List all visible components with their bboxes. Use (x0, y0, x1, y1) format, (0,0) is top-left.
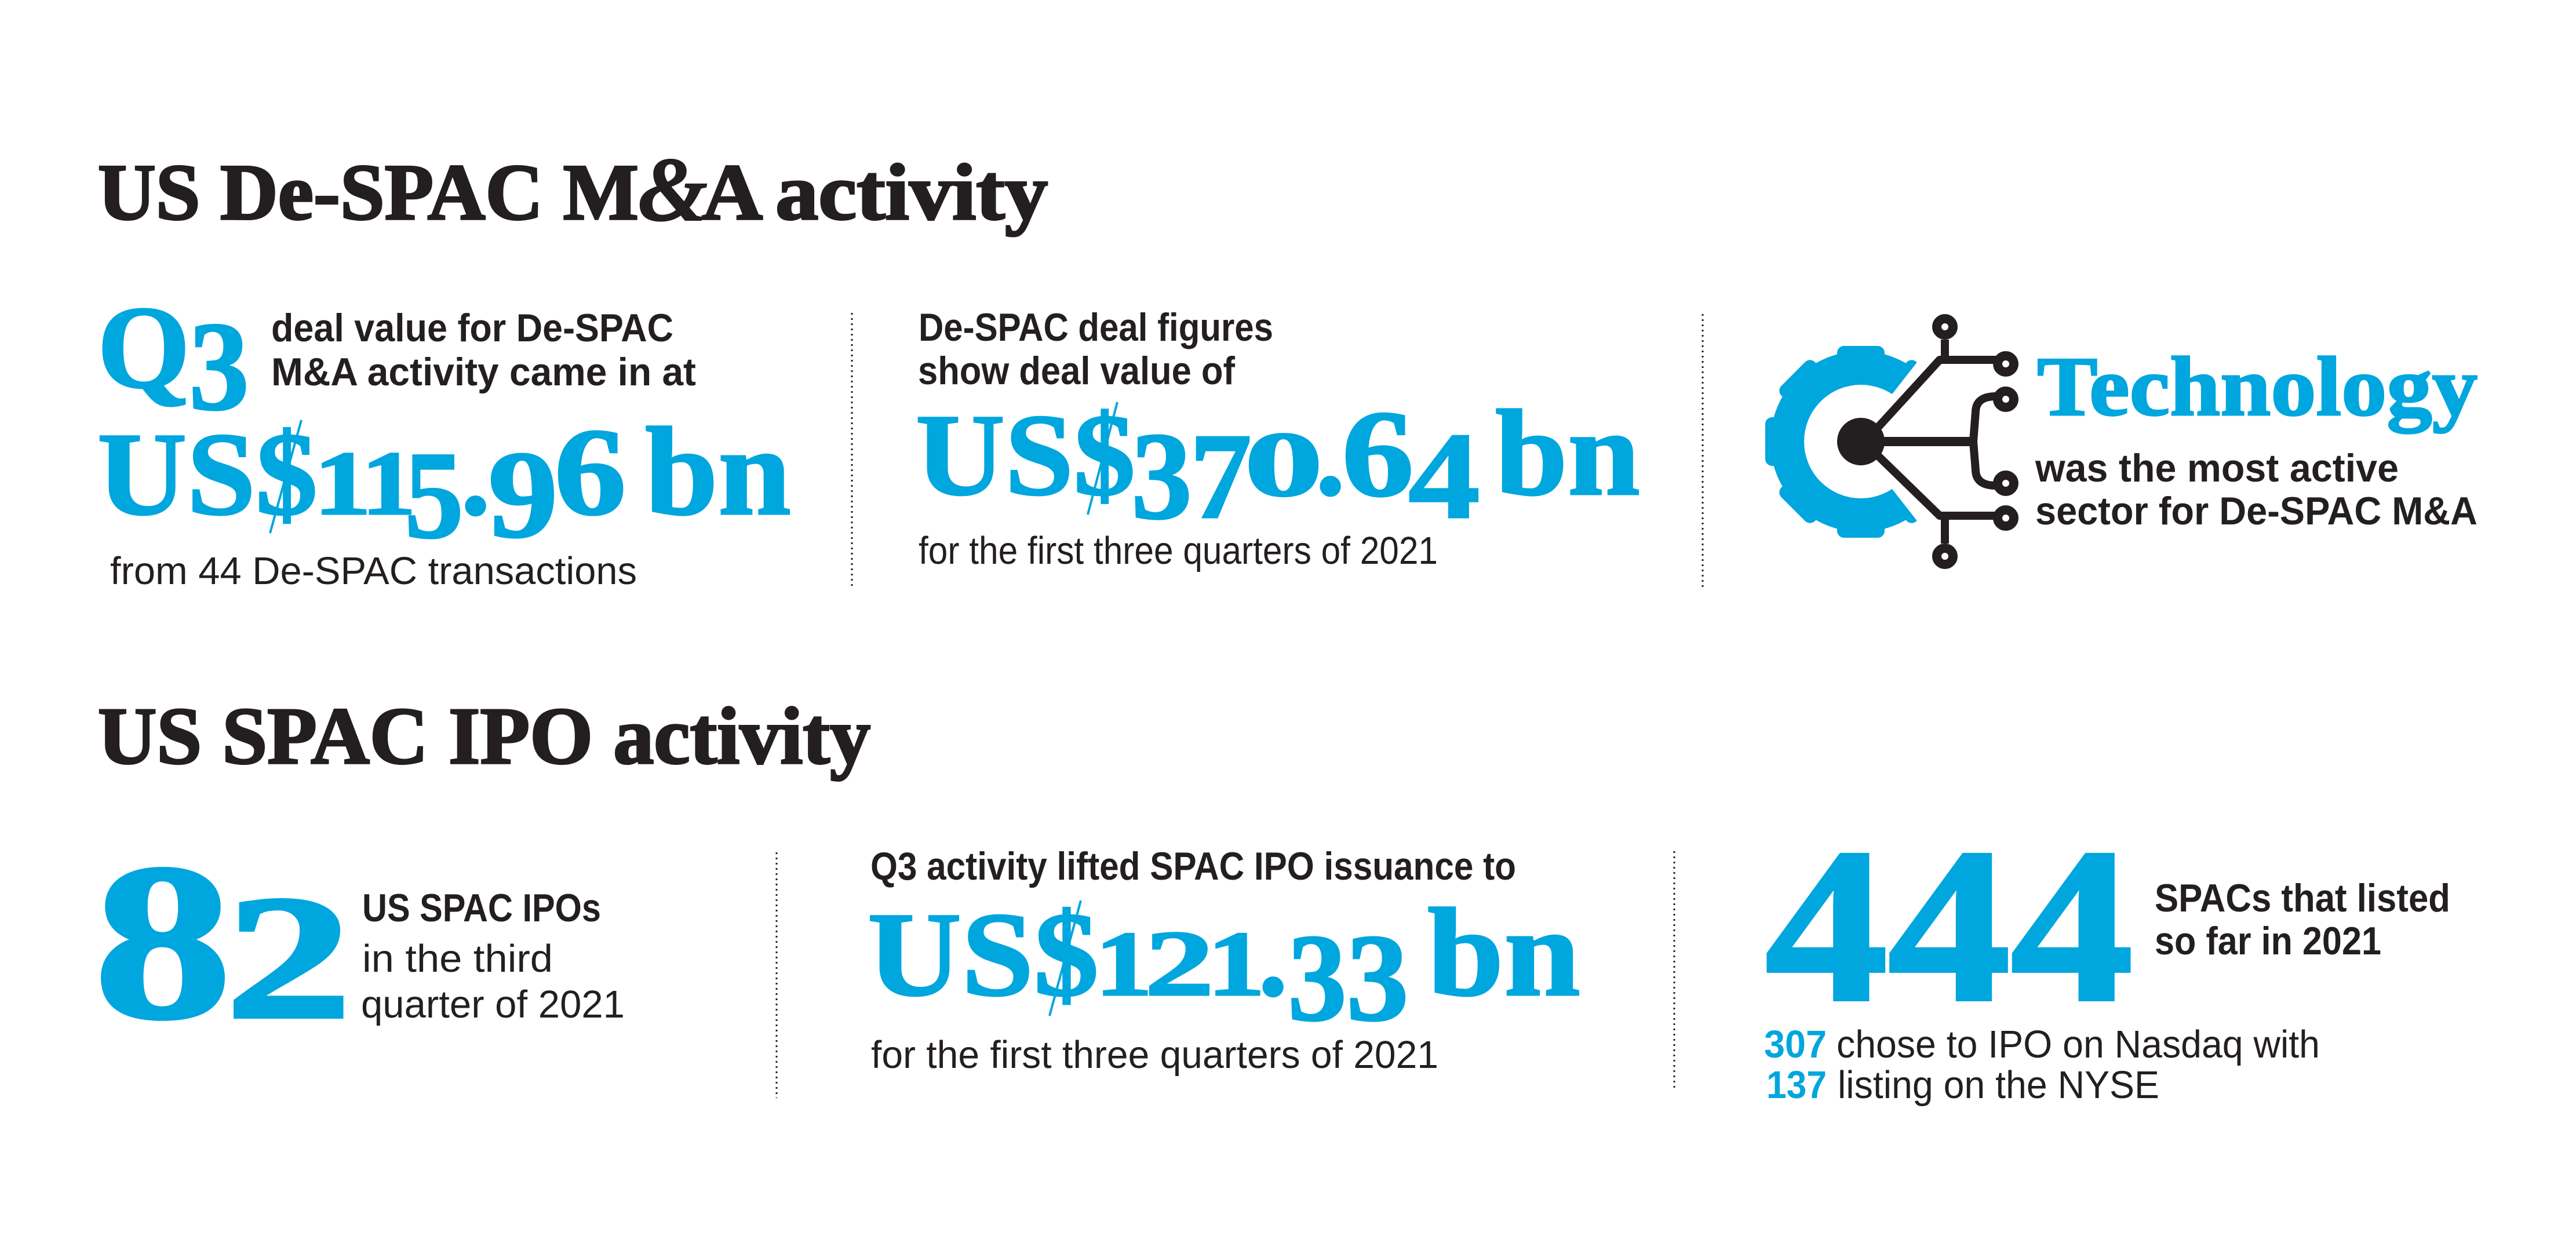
figure: US$121.33 bn: 2 (1145, 912, 1214, 1016)
heading: US De-SPAC M&A activity: US De-SPAC M (98, 148, 639, 236)
text: Nasdaq and NYSE split: listing on the NYSE (1838, 1063, 2159, 1107)
heading: US De-SPAC M&A activity (98, 139, 1048, 240)
figure: 82: 2 (225, 859, 352, 1055)
text: deal figures description: De-SPAC deal figures (919, 305, 1273, 349)
figure: US$370.64 bn: 7 (1190, 408, 1252, 544)
text: US SPAC IPOs in the third quarter of 2021: US SPAC IPOs (362, 886, 601, 930)
figure: US$370.64 bn: US$ (916, 390, 1135, 520)
text: deal value description: M&A activity came in at (271, 350, 696, 394)
Q3 label (97, 282, 249, 437)
figure: US$370.64 bn: 4 (1408, 407, 1480, 545)
figure: US$370.64 bn (916, 385, 1640, 545)
figure: US$121.33 bn: 1 (1207, 912, 1265, 1015)
figure: US$121.33 bn (868, 883, 1580, 1047)
figure: US$370.64 bn: 3 (1131, 407, 1192, 545)
figure: 82: 8 (94, 819, 232, 1066)
heading: US De-SPAC M&A activity: A (702, 148, 763, 236)
text: most active sector: sector for De-SPAC M&A (2035, 489, 2477, 533)
figure: US$121.33 bn: 3 (1346, 909, 1409, 1047)
text: Nasdaq and NYSE split: chose to IPO on Nasdaq with (1837, 1023, 2320, 1066)
figure: US$115.96 bn: US$ (97, 409, 318, 540)
figure: US$121.33 bn: bn (1427, 883, 1580, 1023)
figure: US$115.96 bn: 5 (405, 426, 464, 564)
gear (1765, 346, 1982, 538)
Q3 label: Q (97, 282, 190, 413)
icon: gear with circuit lines (1765, 319, 2014, 564)
text: Nasdaq and NYSE split: 307 (1764, 1023, 1827, 1066)
figure: US$370.64 bn: bn (1495, 385, 1640, 521)
figure: US$121.33 bn: US$ (868, 888, 1099, 1021)
figure: US$121.33 bn: . (1258, 889, 1288, 1021)
figure: US$370.64 bn: 6 (1342, 385, 1414, 523)
heading: Technology: Technology (2037, 340, 2477, 433)
heading: US De-SPAC M&A activity: & (638, 139, 708, 240)
circuit lines (1837, 319, 2014, 564)
figure: US$370.64 bn: 0 (1244, 413, 1323, 516)
text: Nasdaq and NYSE split: 137 (1766, 1063, 1827, 1107)
panel: technology sector (1765, 319, 2477, 564)
text: Q3 activity lifted SPAC IPO issuance: Q3 activity lifted SPAC IPO issuance to (870, 844, 1516, 888)
panel: SPAC IPO issuance (868, 844, 1580, 1077)
text: SPACs that listed so far in 2021: SPACs that listed (2155, 876, 2450, 920)
figure: US$115.96 bn (97, 402, 791, 564)
text: US SPAC IPOs in the third quarter of 2021: in the third (362, 937, 553, 980)
text: deal value description: deal value for De-SPAC (271, 306, 673, 350)
figure: US$121.33 bn: 3 (1288, 909, 1347, 1047)
figure: US$370.64 bn: . (1316, 389, 1345, 520)
text: most active sector: was the most active (2035, 446, 2399, 490)
figure: US$115.96 bn: 6 (554, 403, 626, 541)
panel: De-SPAC deal figures (916, 305, 1640, 573)
text: for the first three quarters of 2021: for the first three quarters of 2021 (919, 529, 1438, 573)
figure: US$115.96 bn: . (461, 409, 490, 540)
text: deal figures description (918, 305, 1273, 393)
text: US SPAC IPOs in the third quarter of 2021: quarter of 2021 (361, 983, 625, 1026)
text: SPACs that listed so far in 2021: so far in 2021 (2155, 919, 2381, 963)
text: deal figures description: show deal value of (918, 349, 1235, 393)
text: most active sector (2035, 446, 2477, 533)
figure: US$115.96 bn: 9 (488, 425, 558, 564)
text: from 44 De-SPAC transactions: from 44 De-SPAC transactions (110, 549, 637, 593)
text: Nasdaq and NYSE split (1764, 1023, 2320, 1107)
figure: US$115.96 bn: 1 (361, 433, 416, 534)
text: SPACs that listed so far in 2021 (2155, 876, 2450, 963)
Q3 label: 3 (189, 296, 249, 437)
text: for the first three quarters of 2021: for the first three quarters of 2021 (871, 1033, 1438, 1077)
panel: 444 SPACs listed (1764, 804, 2450, 1107)
heading: US SPAC IPO activity: US SPAC IPO activity (98, 691, 870, 781)
figure: US$121.33 bn: 1 (1095, 912, 1153, 1015)
text: US SPAC IPOs in the third quarter of 2021 (361, 886, 625, 1026)
heading: US De-SPAC M&A activity: activity (775, 148, 1048, 236)
figure: US$115.96 bn: bn (645, 402, 791, 542)
panel: Q3 deal value (97, 282, 791, 593)
figure: US$115.96 bn: 1 (314, 433, 371, 534)
text: deal value description (271, 306, 696, 394)
figure: 444: 444 (1765, 804, 2133, 1048)
figure: 82 (94, 819, 352, 1066)
panel: 82 US SPAC IPOs (94, 819, 625, 1066)
